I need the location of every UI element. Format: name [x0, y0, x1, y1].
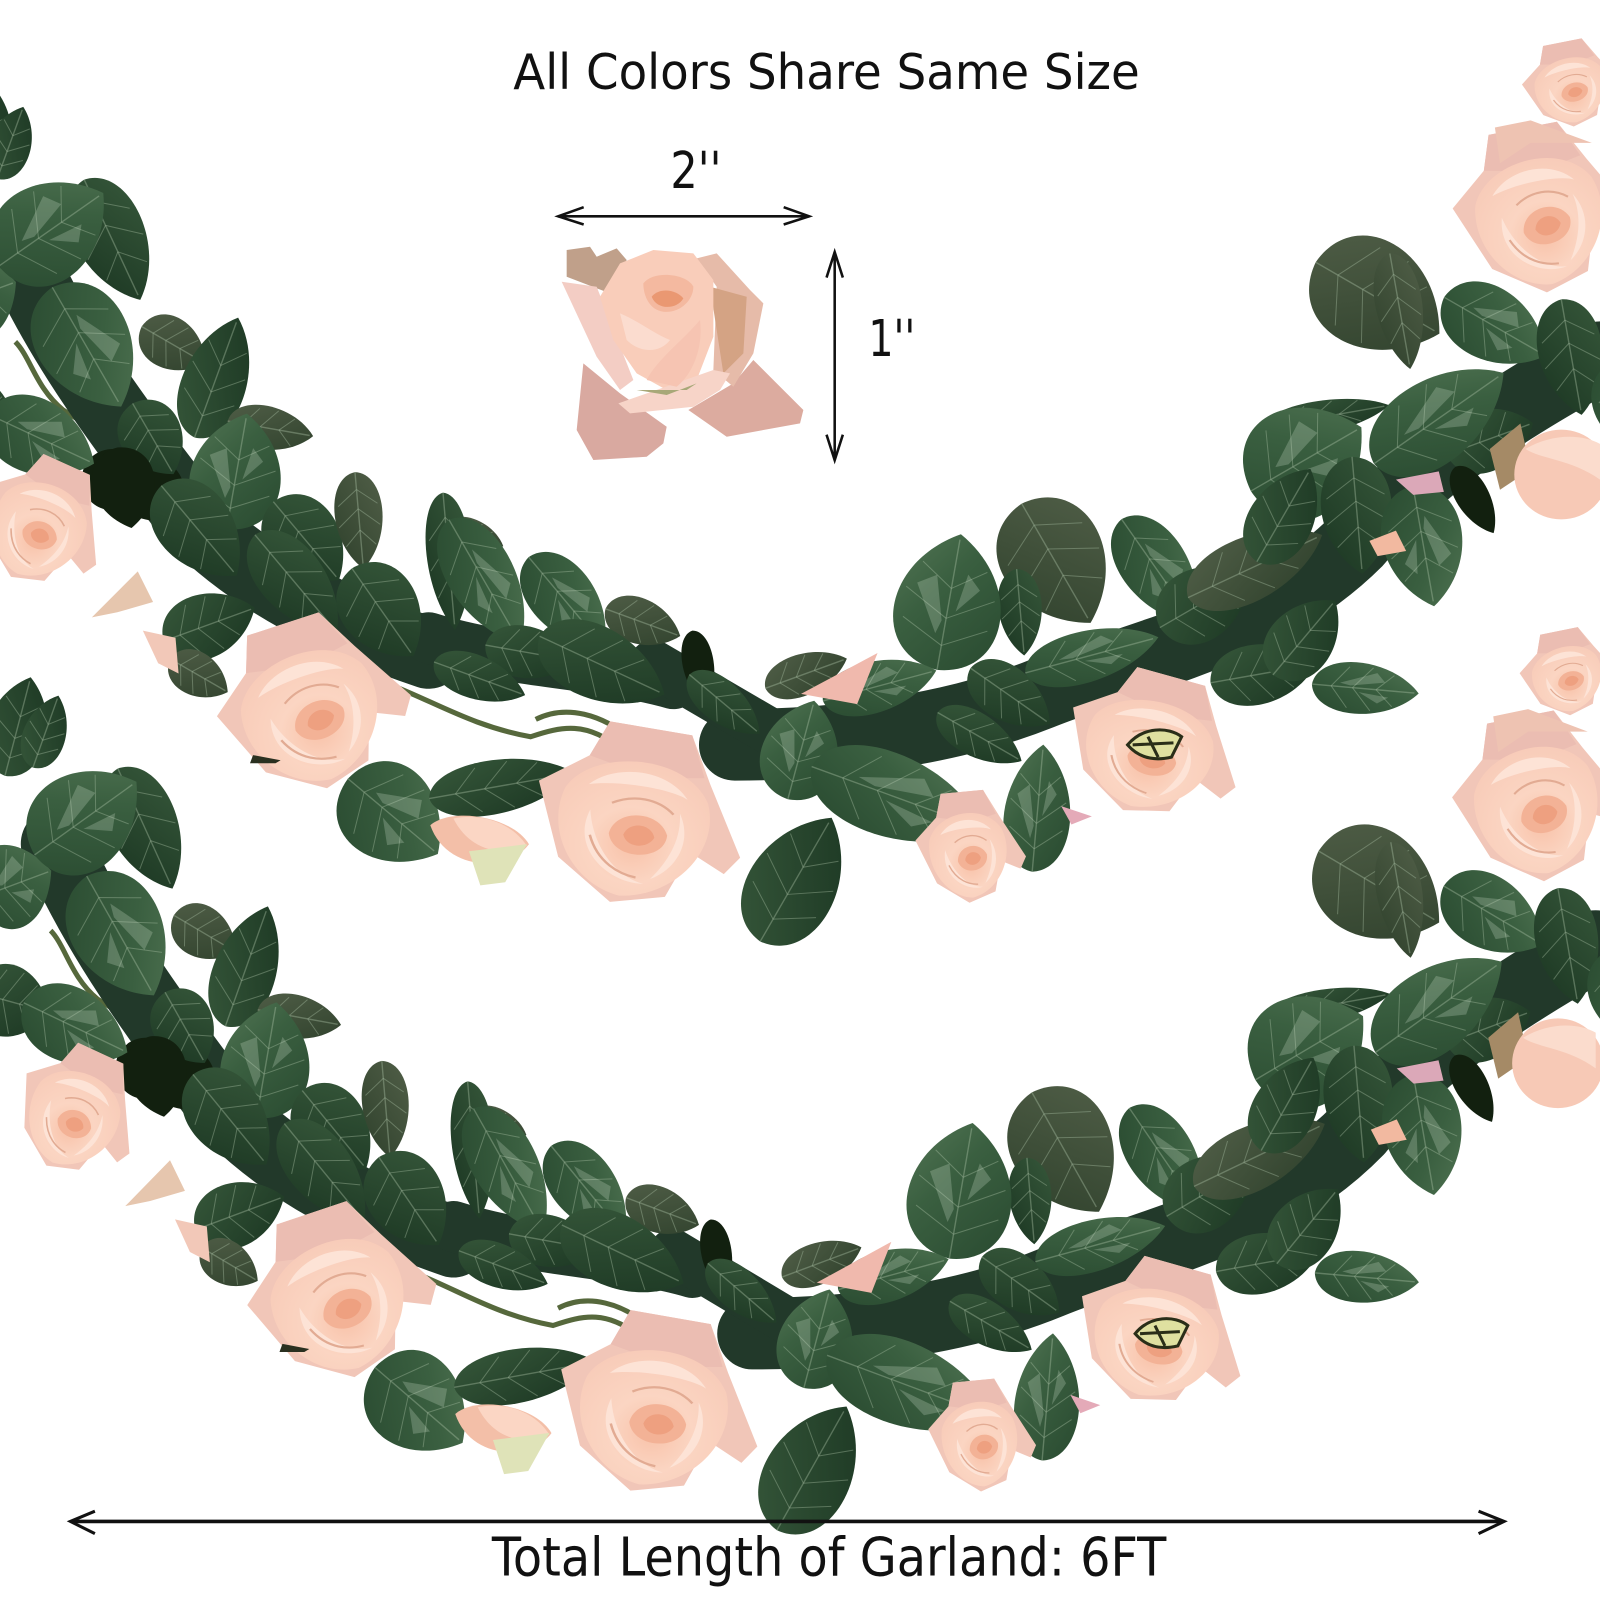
garland: upper strand: [0, 29, 1600, 964]
title: All Colors Share Same Size: [513, 44, 1140, 101]
large roses on the upper strand: [0, 29, 1600, 915]
leaves: right rising section: [1223, 215, 1600, 613]
width label: 2'': [670, 142, 721, 201]
arrow: rose height: [827, 252, 843, 460]
arrow: rose width: [558, 207, 809, 224]
rose sample: [562, 247, 803, 460]
leaves: centre section: [317, 491, 870, 964]
length label: Total Length of Garland: 6FT: [491, 1527, 1167, 1589]
garland: lower strand: [0, 617, 1600, 1552]
height label: 1'': [868, 310, 915, 369]
small rose buds: [92, 423, 1600, 910]
leaves: left section: [0, 99, 445, 711]
leaves: right of centre section: [797, 478, 1421, 875]
vine stems: [15, 342, 633, 750]
dark foliage core: [20, 255, 1600, 745]
leaves: far-left extension for the offset strand: [0, 80, 31, 459]
arrow: total length: [70, 1511, 1504, 1534]
